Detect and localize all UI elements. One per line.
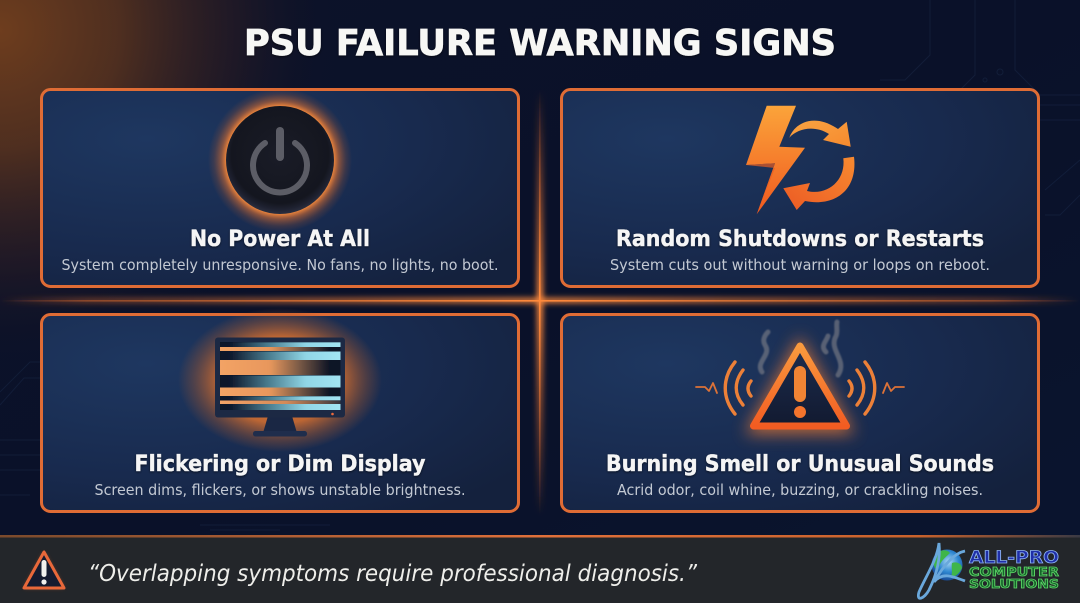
logo: all-pro computer solutions: ALL-PRO	[969, 548, 1059, 568]
description: no power at all: System completely unresponsive. No fans, no lights, no boot.	[62, 256, 498, 274]
panel: no power at all	[42, 88, 518, 286]
panel: flickering display	[42, 308, 518, 512]
footer bar	[0, 535, 1080, 603]
logo: all-pro computer solutions: SOLUTIONS	[969, 576, 1059, 591]
description: flickering display: Screen dims, flickers, or shows unstable brightness.	[94, 481, 466, 499]
icon: footer warning triangle	[24, 552, 64, 588]
logo: all-pro computer solutions: COMPUTER	[969, 564, 1059, 579]
icon: lightning bolt and restart arrows	[746, 106, 854, 214]
icon: flickering monitor	[178, 308, 382, 452]
heading: random shutdowns: Random Shutdowns or Restarts	[616, 227, 984, 252]
panel: burning smell or sounds	[562, 314, 1038, 512]
description: burning smell or sounds: Acrid odor, coil whine, buzzing, or crackling noises.	[617, 481, 983, 499]
icon: power button	[208, 88, 352, 232]
center cross divider glow	[0, 90, 1080, 515]
icon: warning triangle with smoke and sound waves	[696, 322, 904, 434]
description: random shutdowns: System cuts out without warning or loops on reboot.	[610, 256, 990, 274]
heading: burning smell or sounds: Burning Smell or Unusual Sounds	[606, 452, 994, 477]
logo: all-pro computer solutions	[918, 543, 1059, 598]
heading: flickering display: Flickering or Dim Display	[134, 452, 426, 477]
heading: no power at all: No Power At All	[190, 227, 370, 252]
quote: “Overlapping symptoms require professional diagnosis.”	[88, 561, 698, 587]
panel: random shutdowns	[562, 90, 1038, 286]
title: PSU FAILURE WARNING SIGNS	[244, 23, 836, 64]
